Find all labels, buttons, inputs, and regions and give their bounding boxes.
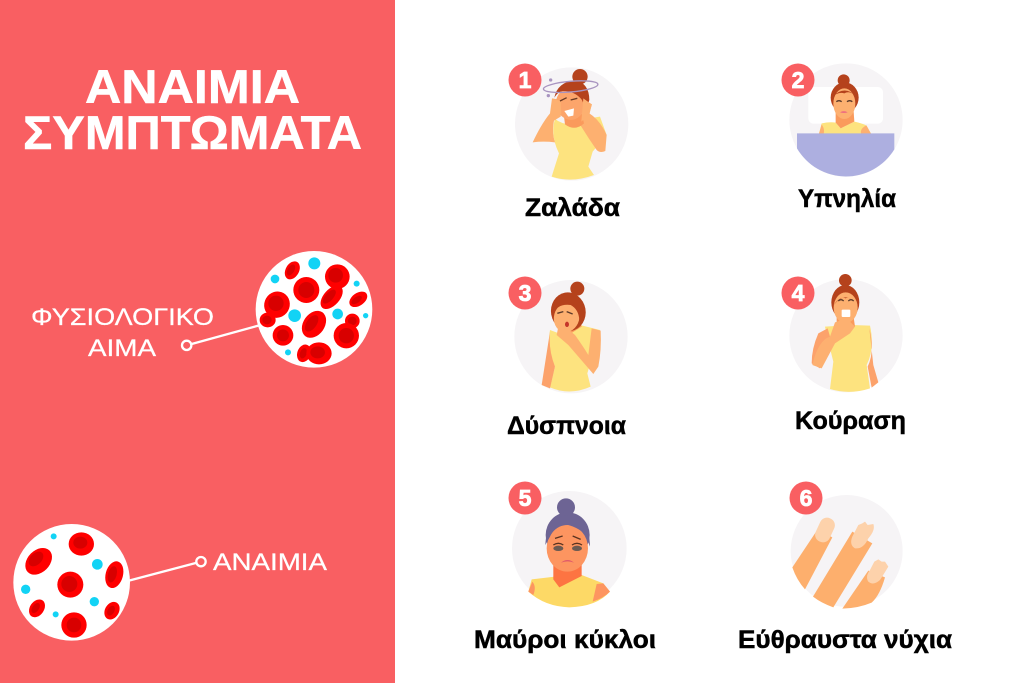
badge 3 — [508, 276, 542, 310]
normal blood sample illustration — [182, 251, 372, 368]
badge 4 — [782, 276, 814, 310]
symptom 5: dark circles illustration — [512, 491, 627, 607]
label: sleepiness: Υπνηλία — [798, 185, 897, 213]
label: dizziness: Ζαλάδα — [525, 194, 621, 222]
badge 6: 6 — [800, 485, 812, 511]
label: normal blood — [31, 304, 214, 362]
badge 4: 4 — [792, 280, 805, 306]
title — [23, 60, 362, 159]
label: normal blood: ΦΥΣΙΟΛΟΓΙΚΟ — [31, 304, 214, 331]
badge 5: 5 — [519, 485, 532, 511]
badge 6 — [790, 482, 822, 514]
label: dyspnea: Δύσπνοια — [507, 412, 627, 440]
title: ΣΥΜΠΤΩΜΑΤΑ — [23, 106, 362, 159]
badge 2: 2 — [792, 67, 804, 93]
symptom 4: fatigue illustration — [789, 274, 903, 392]
label: tiredness: Κούραση — [795, 407, 906, 435]
label: anemia: ΑΝΑΙΜΙΑ — [213, 549, 327, 576]
symptom 6: brittle nails illustration — [791, 495, 903, 609]
label: brittle nails: Εύθραυστα νύχια — [738, 626, 953, 654]
badge 1: 1 — [519, 67, 532, 93]
badge 3: 3 — [519, 280, 531, 306]
anemia blood sample illustration — [13, 524, 206, 641]
symptom 2: sleepiness illustration — [789, 63, 903, 177]
symptom 1: dizziness illustration — [515, 67, 628, 181]
left red panel — [0, 0, 395, 683]
title: ΑΝΑΙΜΙΑ — [85, 60, 300, 113]
badge 2 — [782, 64, 814, 96]
badge 1 — [508, 64, 542, 96]
badge 5 — [508, 482, 542, 514]
symptom 3: shortness of breath illustration — [514, 280, 628, 393]
label: normal blood: ΑΙΜΑ — [88, 335, 156, 362]
label: dark circles: Μαύροι κύκλοι — [474, 626, 656, 654]
